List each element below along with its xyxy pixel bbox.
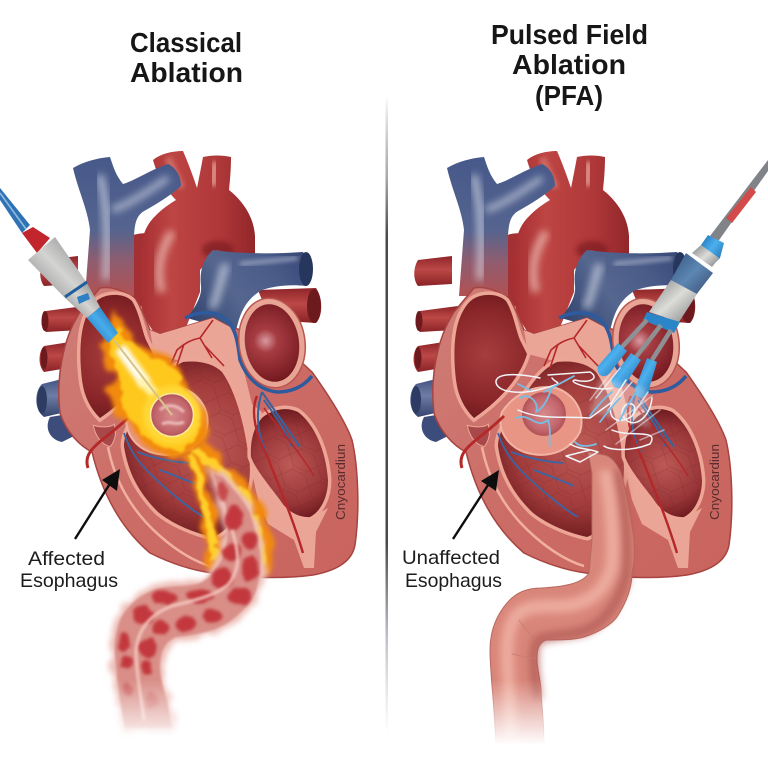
label: Affected Esophagus (20, 548, 118, 592)
title: Pulsed Field Ablation (PFA): Pulsed Field (491, 19, 648, 50)
panel: PFA heart (410, 151, 732, 577)
title: Classical Ablation: Ablation (130, 57, 243, 88)
lesion (150, 394, 194, 436)
arrow: to unaffected esophagus (453, 470, 499, 539)
centre divider (386, 95, 388, 735)
label: Affected Esophagus: Affected (28, 548, 105, 570)
title: Pulsed Field Ablation (PFA): (PFA) (535, 80, 603, 111)
burn blotches (118, 483, 259, 708)
panel: classical ablation heart (36, 151, 358, 577)
label: Unaffected Esophagus: Esophagus (405, 570, 502, 592)
label: Unaffected Esophagus: Unaffected (402, 547, 500, 569)
lesion (522, 392, 566, 436)
label: Affected Esophagus: Esophagus (20, 570, 118, 592)
orange halo (98, 308, 208, 456)
yellow body (108, 328, 199, 449)
title: Pulsed Field Ablation (PFA) (491, 19, 648, 111)
flame: thermal energy spreading (98, 308, 265, 574)
label: Unaffected Esophagus (402, 547, 502, 592)
title: Classical Ablation (130, 27, 243, 88)
title: Classical Ablation: Classical (130, 27, 242, 58)
esophagus: affected, burned (115, 473, 260, 728)
pulsed field energy tendrils (496, 368, 664, 462)
splines (622, 320, 671, 360)
electrode tips (598, 343, 627, 376)
title: Pulsed Field Ablation (PFA): Ablation (512, 49, 626, 80)
myocardium label: Cnyocardiun (707, 444, 722, 520)
catheter: PFA multi-spline (598, 160, 768, 398)
catheter: classical ablation (0, 188, 172, 415)
arrow: to affected esophagus (75, 469, 120, 539)
myocardium label: Cnyocardiun (333, 444, 348, 520)
esophagus: unaffected, healthy (490, 452, 634, 745)
